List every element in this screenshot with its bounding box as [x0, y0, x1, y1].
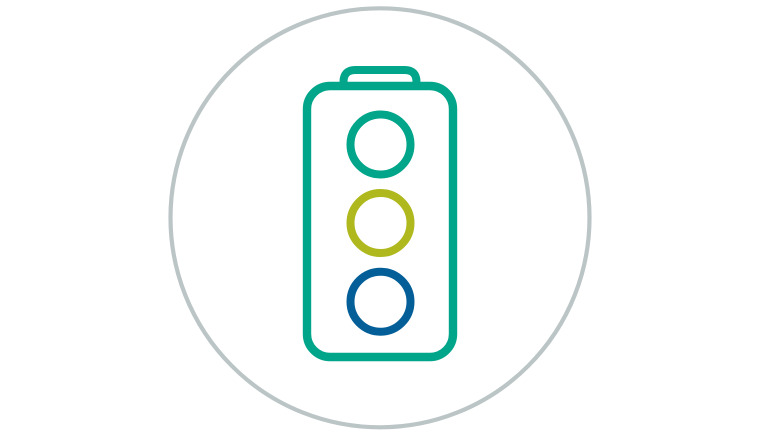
- middle light: yellow-green: [350, 193, 410, 253]
- outer circle: [170, 8, 590, 427]
- bottom light: blue: [350, 272, 410, 332]
- icon: traffic light: [307, 70, 453, 357]
- traffic light body: [307, 86, 453, 357]
- traffic light top cap: [344, 70, 416, 86]
- top light: green: [350, 114, 410, 174]
